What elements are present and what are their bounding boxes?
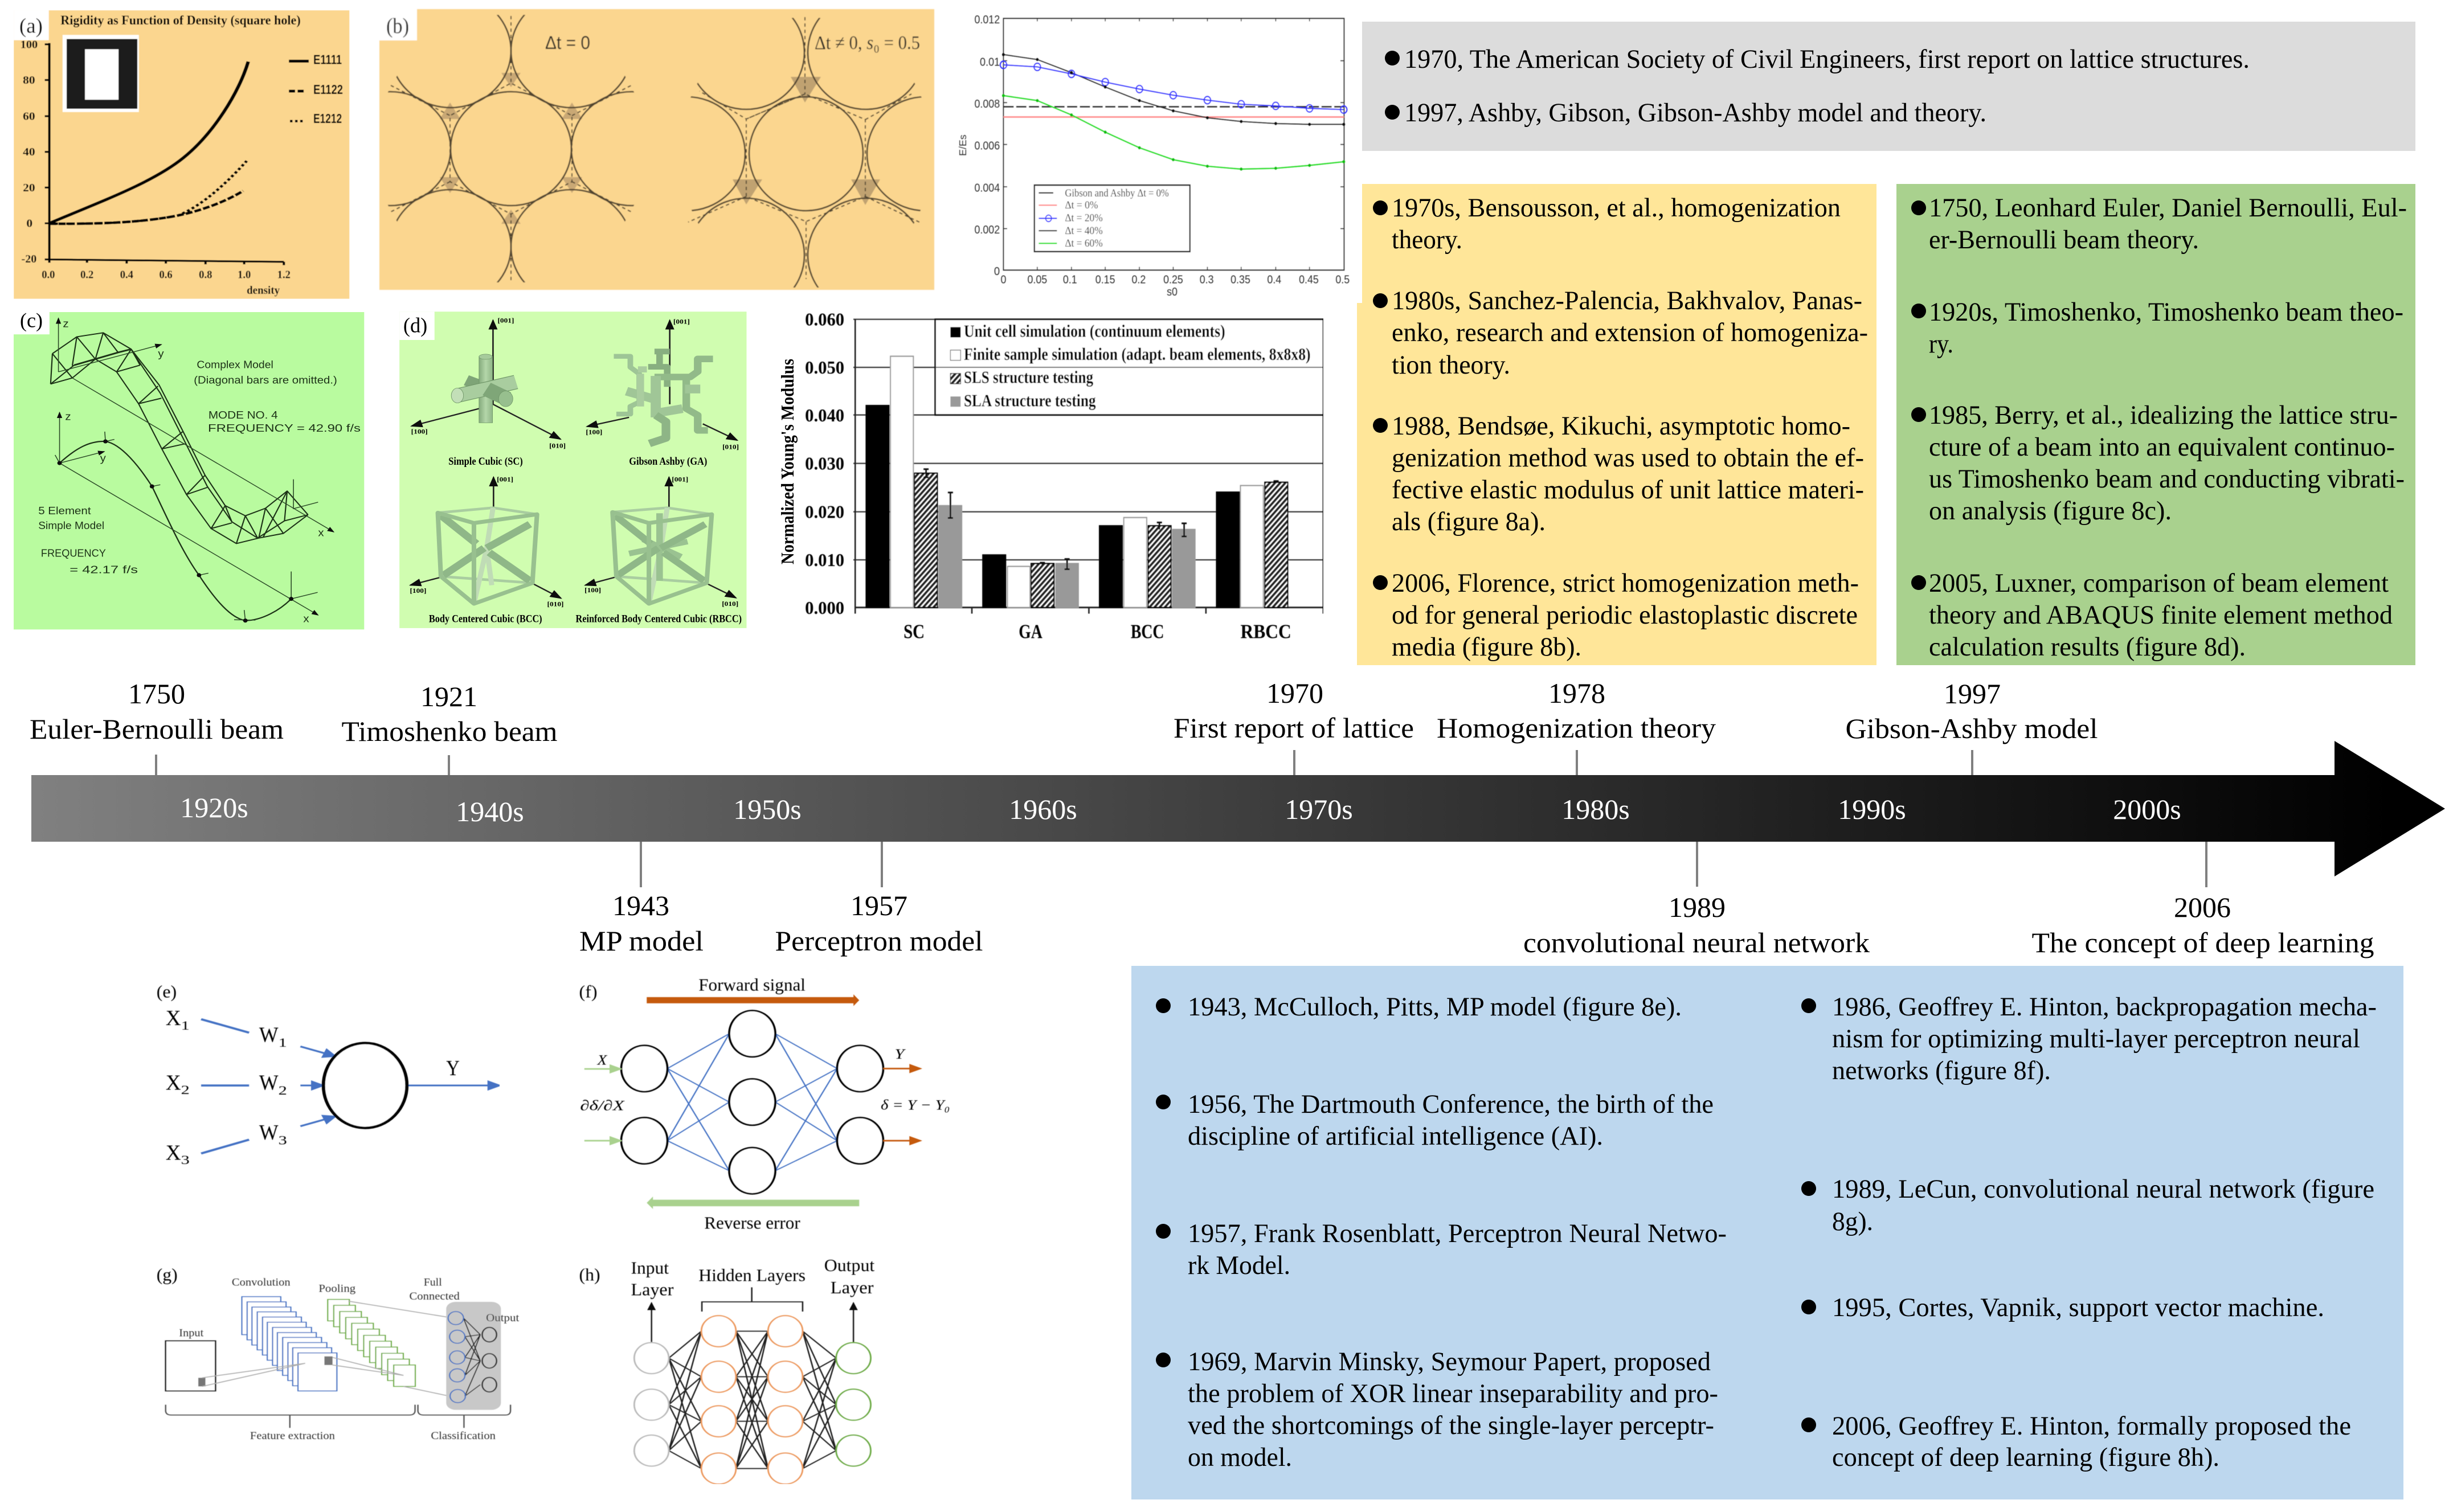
inputs and weights: 1 xyxy=(279,1035,287,1050)
cell: delta t not 0 xyxy=(688,17,922,288)
milestone: 1970: 1970 xyxy=(1266,677,1323,709)
y-axis tick labels: 0.008 xyxy=(974,98,1000,110)
panel: (g) convolutional network xyxy=(157,1265,520,1442)
decade labels: 1970s xyxy=(1285,793,1353,825)
y-axis tick labels: 0.020 xyxy=(805,502,844,522)
milestone: 1997: Gibson-Ashby model xyxy=(1846,712,2098,744)
milestone: 1943: MP model xyxy=(579,925,704,957)
blue markers xyxy=(1000,61,1347,113)
chart title: Rigidity as Function of Density (square hole) xyxy=(60,13,301,28)
milestone: 1970: First report of lattice xyxy=(1174,712,1414,744)
milestone: 1997 xyxy=(1846,678,2098,744)
label (c): (c) xyxy=(20,310,43,332)
bullet items xyxy=(1911,193,2407,662)
annotations: z xyxy=(63,318,69,330)
right column items: nism for optimizing multi-layer perceptron neural xyxy=(1832,1024,2360,1054)
legend: Finite sample simulation (adapt. beam elements, 8x8x8) xyxy=(964,346,1311,364)
neuron circle xyxy=(324,1043,407,1128)
left column items: 1956, The Dartmouth Conference, the birth of the xyxy=(1188,1089,1714,1119)
decade labels: 1920s xyxy=(180,792,248,823)
inset image: square hole xyxy=(63,35,139,112)
axis tick labels: density xyxy=(247,284,280,296)
math labels: δ = Y − Y₀ xyxy=(881,1097,950,1113)
legend xyxy=(289,52,343,126)
output arrows xyxy=(883,1068,920,1141)
milestone: 1957: Perceptron model xyxy=(775,925,983,957)
chart: E/Es vs s0 xyxy=(958,14,1350,298)
axis tags: [010] xyxy=(549,442,566,449)
milestone: 2006: The concept of deep learning xyxy=(2031,927,2374,958)
bullet items: 1997, Ashby, Gibson, Gibson-Ashby model and theory. xyxy=(1404,98,1986,128)
axes xyxy=(45,43,284,265)
axis tick labels: 60 xyxy=(23,110,35,122)
x-axis tick labels: 0.35 xyxy=(1230,273,1250,286)
right column items: 1986, Geoffrey E. Hinton, backpropagation mecha- xyxy=(1832,992,2377,1022)
inputs and weights: 2 xyxy=(181,1083,190,1097)
legend: Gibson and Ashby Δt = 0% xyxy=(1065,187,1169,199)
annotations: Complex Model xyxy=(197,359,273,371)
y-axis tick labels: 0.004 xyxy=(974,182,1000,195)
label (h): (h) xyxy=(579,1265,600,1284)
label (g): (g) xyxy=(157,1265,178,1284)
classifier block xyxy=(446,1302,501,1410)
bullet items: als (figure 8a). xyxy=(1392,507,1546,536)
convolution label: Convolution xyxy=(232,1276,291,1288)
annotations: FREQUENCY = 42.90 f/s xyxy=(208,423,361,435)
inputs and weights: 1 xyxy=(181,1018,190,1032)
label (b): (b) xyxy=(386,14,409,38)
bullet items: on analysis (figure 8c). xyxy=(1929,496,2172,526)
decade labels: 1980s xyxy=(1561,793,1630,825)
y-axis tick labels: 0.006 xyxy=(974,140,1000,153)
panel: yellow text box xyxy=(1357,184,1876,665)
milestone: 1921 xyxy=(342,681,558,747)
annotations: Simple Model xyxy=(38,520,104,532)
bullet items: media (figure 8b). xyxy=(1392,632,1581,662)
hidden nodes xyxy=(701,1316,803,1484)
cell captions: Simple Cubic (SC) xyxy=(448,455,523,467)
axis tags: [100] xyxy=(584,587,601,594)
axis tick labels: 100 xyxy=(21,38,38,51)
legend: E1212 xyxy=(313,111,342,126)
milestone: 1750 xyxy=(30,678,284,745)
legend: SLS structure testing xyxy=(964,368,1094,387)
axis tick labels: 0 xyxy=(26,217,32,230)
y-axis tick labels: 0.010 xyxy=(805,550,844,570)
bullet items: enko, research and extension of homogeniza- xyxy=(1392,318,1868,347)
forward signal xyxy=(647,975,859,1006)
y-axis tick labels: 0.030 xyxy=(805,454,844,474)
panel: green text box xyxy=(1896,184,2415,665)
milestone: 1943: 1943 xyxy=(612,890,669,921)
decade labels: 1940s xyxy=(456,796,524,827)
milestone: 1978 xyxy=(1437,677,1716,744)
math labels: ∂δ/∂X xyxy=(580,1097,625,1113)
annotations: x xyxy=(318,527,324,539)
cell: delta t = 0 xyxy=(387,14,635,283)
x-axis tick labels: 0 xyxy=(1001,273,1006,286)
black and green markers xyxy=(1002,53,1345,171)
cell: gibson ashby xyxy=(587,321,737,444)
math labels: X xyxy=(596,1052,607,1068)
axis tick labels: 1.0 xyxy=(238,268,251,281)
bar chart: normalized Young's modulus xyxy=(805,310,1323,643)
annotations xyxy=(38,318,361,625)
panel: (a) rigidity chart xyxy=(14,10,349,299)
forward signal: Forward signal xyxy=(698,975,806,994)
axis tick labels: 40 xyxy=(23,145,35,158)
axis tags: [001] xyxy=(497,317,514,324)
inputs and weights: X xyxy=(166,1140,181,1165)
x-axis tick labels: s0 xyxy=(1167,286,1178,298)
left column items: discipline of artificial intelligence (AI). xyxy=(1188,1121,1603,1151)
axis tags: [001] xyxy=(672,476,688,483)
panel: (e) MP neuron xyxy=(157,982,500,1167)
x-axis tick labels: 0.4 xyxy=(1267,273,1282,286)
classifier labels: Output xyxy=(486,1312,520,1324)
decade labels: 2000s xyxy=(2113,793,2181,825)
axis tags: [010] xyxy=(722,443,739,450)
label: delta t not 0: Δt ≠ 0, s₀ = 0.5 xyxy=(815,32,920,54)
milestone: 1750: 1750 xyxy=(128,678,185,710)
bracket captions xyxy=(250,1430,496,1442)
axis tick labels: 0.6 xyxy=(160,268,173,281)
axis tick labels: 0.4 xyxy=(120,268,133,281)
left column items: 1943, McCulloch, Pitts, MP model (figure 8e). xyxy=(1188,992,1682,1022)
bullet items: tion theory. xyxy=(1392,350,1510,380)
inputs and weights: X xyxy=(166,1070,181,1095)
legend: Δt = 0% xyxy=(1065,199,1098,211)
inputs and weights: X xyxy=(166,1006,181,1030)
bullet items: fective elastic modulus of unit lattice materi- xyxy=(1392,475,1864,505)
left column items: the problem of XOR linear inseparability and pro- xyxy=(1188,1379,1718,1408)
classifier labels: Full xyxy=(424,1276,442,1288)
bullet items xyxy=(1373,193,1868,662)
error bars xyxy=(923,469,1278,569)
input image xyxy=(166,1327,215,1391)
bullet items: calculation results (figure 8d). xyxy=(1929,632,2246,662)
bullet items: 1988, Bendsøe, Kikuchi, asymptotic homo- xyxy=(1392,411,1850,441)
label: delta t = 0: Δt = 0 xyxy=(545,32,590,53)
x-axis tick labels: 0.3 xyxy=(1200,273,1214,286)
annotations: 5 Element xyxy=(38,505,91,517)
left column items: on model. xyxy=(1188,1443,1292,1472)
milestone: 1978: 1978 xyxy=(1548,677,1605,709)
y-axis tick labels: 0.060 xyxy=(805,310,844,330)
legend: Δt = 60% xyxy=(1065,237,1103,249)
inputs and weights: 3 xyxy=(181,1153,190,1167)
bullet items: od for general periodic elastoplastic discrete xyxy=(1392,600,1858,630)
layer labels: Hidden Layers xyxy=(698,1265,806,1285)
bracket captions: Feature extraction xyxy=(250,1430,335,1442)
y-axis tick labels xyxy=(974,14,1000,278)
bullet items: 1920s, Timoshenko, Timoshenko beam theo- xyxy=(1929,297,2403,327)
right column items: 2006, Geoffrey E. Hinton, formally proposed the xyxy=(1832,1411,2351,1441)
y-axis tick labels: 0.012 xyxy=(974,14,1000,26)
bullet items: 1980s, Sanchez-Palencia, Bakhvalov, Panas- xyxy=(1392,286,1862,315)
math labels: Y xyxy=(895,1046,906,1062)
axis tick labels: 20 xyxy=(23,181,35,194)
input arrows xyxy=(584,1069,620,1141)
x-axis group labels: GA xyxy=(1019,621,1042,643)
bullet items: 1750, Leonhard Euler, Daniel Bernoulli, Eul- xyxy=(1929,193,2407,223)
bullet items: us Timoshenko beam and conducting vibrati- xyxy=(1929,464,2405,494)
inputs and weights xyxy=(166,1006,460,1167)
data lines xyxy=(1004,55,1344,169)
decade labels: 1950s xyxy=(733,793,802,825)
cell: simple cubic xyxy=(412,321,561,439)
inputs and weights: W xyxy=(259,1120,279,1144)
axis tags xyxy=(410,317,739,608)
bracket captions: Classification xyxy=(431,1430,496,1442)
axis tick labels: 1.2 xyxy=(277,268,291,281)
bullet items: 2005, Luxner, comparison of beam element xyxy=(1929,568,2389,598)
annotations: y xyxy=(100,453,106,464)
milestone: 2006 xyxy=(2031,891,2374,958)
layer labels: Input xyxy=(631,1258,669,1277)
bullet items: theory. xyxy=(1392,225,1462,255)
milestone: 2006: 2006 xyxy=(2174,891,2231,923)
x-axis group labels xyxy=(903,621,1291,643)
inputs and weights: 3 xyxy=(279,1133,287,1148)
x-axis group labels: RBCC xyxy=(1241,621,1291,643)
curves xyxy=(50,62,248,224)
milestone: 1989 xyxy=(1523,891,1870,958)
braces xyxy=(166,1405,510,1428)
x-axis tick labels: 0.1 xyxy=(1063,273,1077,286)
label (d): (d) xyxy=(403,313,427,337)
axis tick labels: 0.0 xyxy=(42,268,55,281)
bullet items: 1970s, Bensousson, et al., homogenization xyxy=(1392,193,1841,223)
bullet items xyxy=(1385,44,2250,128)
output nodes xyxy=(836,1343,870,1466)
annotations: (Diagonal bars are omitted.) xyxy=(194,374,337,386)
decade labels xyxy=(180,792,2181,827)
annotations: x xyxy=(303,613,309,625)
x-axis tick labels: 0.5 xyxy=(1335,273,1350,286)
bullet items: genization method was used to obtain the ef- xyxy=(1392,443,1864,473)
axis tags: [010] xyxy=(547,601,564,608)
milestone: 1957 xyxy=(775,890,983,957)
inputs and weights: Y xyxy=(446,1056,460,1080)
nodes xyxy=(622,1011,883,1194)
panel: blue text box xyxy=(1131,966,2403,1499)
axis tags: [100] xyxy=(586,429,602,436)
y-axis title: E/Es xyxy=(958,134,968,156)
bars: BCC xyxy=(1099,518,1195,608)
left column items: 1957, Frank Rosenblatt, Perceptron Neural Netwo- xyxy=(1188,1219,1727,1248)
y-axis tick labels: 0.040 xyxy=(805,406,844,426)
timeline tick lines xyxy=(156,750,2206,887)
right column items: 8g). xyxy=(1832,1207,1873,1236)
left column items xyxy=(1156,992,1727,1472)
x-axis tick labels: 0.05 xyxy=(1027,273,1047,286)
connections xyxy=(201,1019,500,1153)
axis tick labels: 0.2 xyxy=(80,268,93,281)
convolution stack xyxy=(242,1297,337,1391)
x-axis tick labels: 0.25 xyxy=(1163,273,1183,286)
x-axis tick labels: 0.2 xyxy=(1131,273,1146,286)
legend: Unit cell simulation (continuum elements) xyxy=(964,322,1225,341)
axis tags: [001] xyxy=(673,318,690,325)
layer labels xyxy=(631,1256,874,1299)
axis tick labels: -20 xyxy=(22,252,36,265)
axis tags: [100] xyxy=(411,428,428,435)
simple model reference lines xyxy=(55,412,318,621)
cell: reinforced body centered cubic xyxy=(585,477,736,604)
y-axis tick labels: 0.050 xyxy=(805,358,844,378)
cell captions: Body Centered Cubic (BCC) xyxy=(429,613,542,625)
bracket and arrows xyxy=(652,1288,853,1343)
math labels xyxy=(580,1046,950,1113)
bars: GA xyxy=(983,555,1078,608)
legend: Δt = 40% xyxy=(1065,224,1103,236)
right column items: 1995, Cortes, Vapnik, support vector machine. xyxy=(1832,1293,2324,1322)
x-axis group labels: BCC xyxy=(1131,621,1164,643)
y-axis tick labels: 0.01 xyxy=(980,56,1000,69)
label (e): (e) xyxy=(157,982,177,1001)
axis tick labels: 0.8 xyxy=(199,268,212,281)
legend xyxy=(935,319,1323,415)
simple model nodes xyxy=(58,440,293,622)
left column items: 1969, Marvin Minsky, Seymour Papert, proposed xyxy=(1188,1347,1711,1376)
classifier labels: Connected xyxy=(409,1290,460,1302)
axis tick labels: 80 xyxy=(23,73,35,86)
bar chart y-axis title: Normalized Young's Modulus xyxy=(777,359,798,564)
milestone: 1957: 1957 xyxy=(851,890,907,921)
right column items xyxy=(1801,992,2377,1472)
x-axis tick labels xyxy=(1001,273,1350,298)
input nodes xyxy=(634,1343,669,1466)
timeline arrow xyxy=(31,741,2445,876)
inputs and weights: W xyxy=(259,1070,279,1095)
decade labels: 1990s xyxy=(1838,793,1906,825)
right column items: concept of deep learning (figure 8h). xyxy=(1832,1443,2219,1472)
axis tick labels xyxy=(21,38,291,296)
annotations: MODE NO. 4 xyxy=(208,409,278,421)
x-axis tick labels: 0.45 xyxy=(1299,273,1319,286)
classifier labels xyxy=(409,1276,520,1324)
y-axis tick labels: 0.002 xyxy=(974,224,1000,236)
panel: (f) backpropagation network xyxy=(579,975,950,1232)
x-axis tick labels: 0.15 xyxy=(1095,273,1115,286)
milestone: 1997: 1997 xyxy=(1944,678,2001,710)
left column items: ved the shortcomings of the single-layer perceptr- xyxy=(1188,1411,1714,1440)
legend: Δt = 20% xyxy=(1065,212,1103,224)
cell captions: Reinforced Body Centered Cubic (RBCC) xyxy=(576,613,742,625)
milestone: 1970 xyxy=(1174,677,1414,744)
projection lines xyxy=(202,1301,449,1396)
layer labels: Output xyxy=(824,1256,874,1275)
y-axis tick labels: 0.000 xyxy=(805,599,844,618)
connections xyxy=(667,1034,837,1171)
milestone: 1750: Euler-Bernoulli beam xyxy=(30,713,284,745)
legend: E1122 xyxy=(313,82,343,97)
panel: (h) deep network xyxy=(579,1256,874,1484)
panel: (d) unit cells xyxy=(399,312,746,628)
decade labels: 1960s xyxy=(1009,793,1077,825)
bullet items: 2006, Florence, strict homogenization meth- xyxy=(1392,568,1859,598)
axis tags: [010] xyxy=(722,600,738,608)
milestone: 1989: convolutional neural network xyxy=(1523,927,1870,958)
panel: (c) beam models xyxy=(14,310,364,629)
layer labels: Layer xyxy=(631,1280,673,1299)
axis tags: [001] xyxy=(497,476,513,483)
reverse error xyxy=(647,1197,859,1232)
bullet items: theory and ABAQUS finite element method xyxy=(1929,600,2393,630)
right column items: networks (figure 8f). xyxy=(1832,1056,2051,1085)
annotations: y xyxy=(158,348,164,360)
x-axis group labels: SC xyxy=(903,621,925,643)
milestone: 1978: Homogenization theory xyxy=(1437,712,1716,744)
bullet items: 1985, Berry, et al., idealizing the lattice stru- xyxy=(1929,400,2398,430)
bullet items: 1970, The American Society of Civil Engineers, first report on lattice structures. xyxy=(1404,44,2250,74)
milestone: 1921: 1921 xyxy=(420,681,477,712)
pooling label: Pooling xyxy=(318,1282,355,1294)
input image: Input xyxy=(179,1327,204,1339)
panel: grey text box xyxy=(1362,22,2415,151)
cell: body centered cubic xyxy=(410,477,561,604)
legend: SLA structure testing xyxy=(964,392,1096,411)
reverse error: Reverse error xyxy=(704,1213,800,1232)
milestone: 1943 xyxy=(579,890,704,957)
milestone: 1989: 1989 xyxy=(1669,891,1726,923)
milestone: 1921: Timoshenko beam xyxy=(342,715,558,747)
y-axis tick labels xyxy=(805,310,844,618)
bullet items: ry. xyxy=(1929,329,1953,359)
legend xyxy=(1035,185,1190,252)
pooling stack xyxy=(328,1300,415,1386)
annotations: FREQUENCY xyxy=(41,547,106,559)
complex model reference lines xyxy=(59,318,334,532)
inputs and weights: 2 xyxy=(279,1083,287,1097)
inputs and weights: W xyxy=(259,1023,279,1047)
left column items: rk Model. xyxy=(1188,1251,1290,1280)
layer labels: Layer xyxy=(831,1278,874,1297)
panel: (b) honeycomb cells xyxy=(379,9,935,290)
label (a): (a) xyxy=(19,14,43,38)
bars: SC xyxy=(866,357,962,608)
cell captions: Gibson Ashby (GA) xyxy=(629,455,707,467)
axis tags: [100] xyxy=(410,587,426,595)
bars: RBCC xyxy=(1216,482,1287,608)
annotations: z xyxy=(65,411,71,423)
bullet items: cture of a beam into an equivalent continuo- xyxy=(1929,432,2395,462)
legend: E1111 xyxy=(313,52,342,67)
annotations: = 42.17 f/s xyxy=(69,564,138,576)
bullet items: er-Bernoulli beam theory. xyxy=(1929,225,2199,255)
label (f): (f) xyxy=(579,982,598,1001)
cell captions xyxy=(429,455,742,625)
y-axis tick labels: 0 xyxy=(994,265,1000,278)
right column items: 1989, LeCun, convolutional neural network (figure xyxy=(1832,1174,2374,1204)
complex lattice model xyxy=(51,333,308,543)
connections xyxy=(669,1331,836,1469)
simple beam model xyxy=(60,441,291,621)
